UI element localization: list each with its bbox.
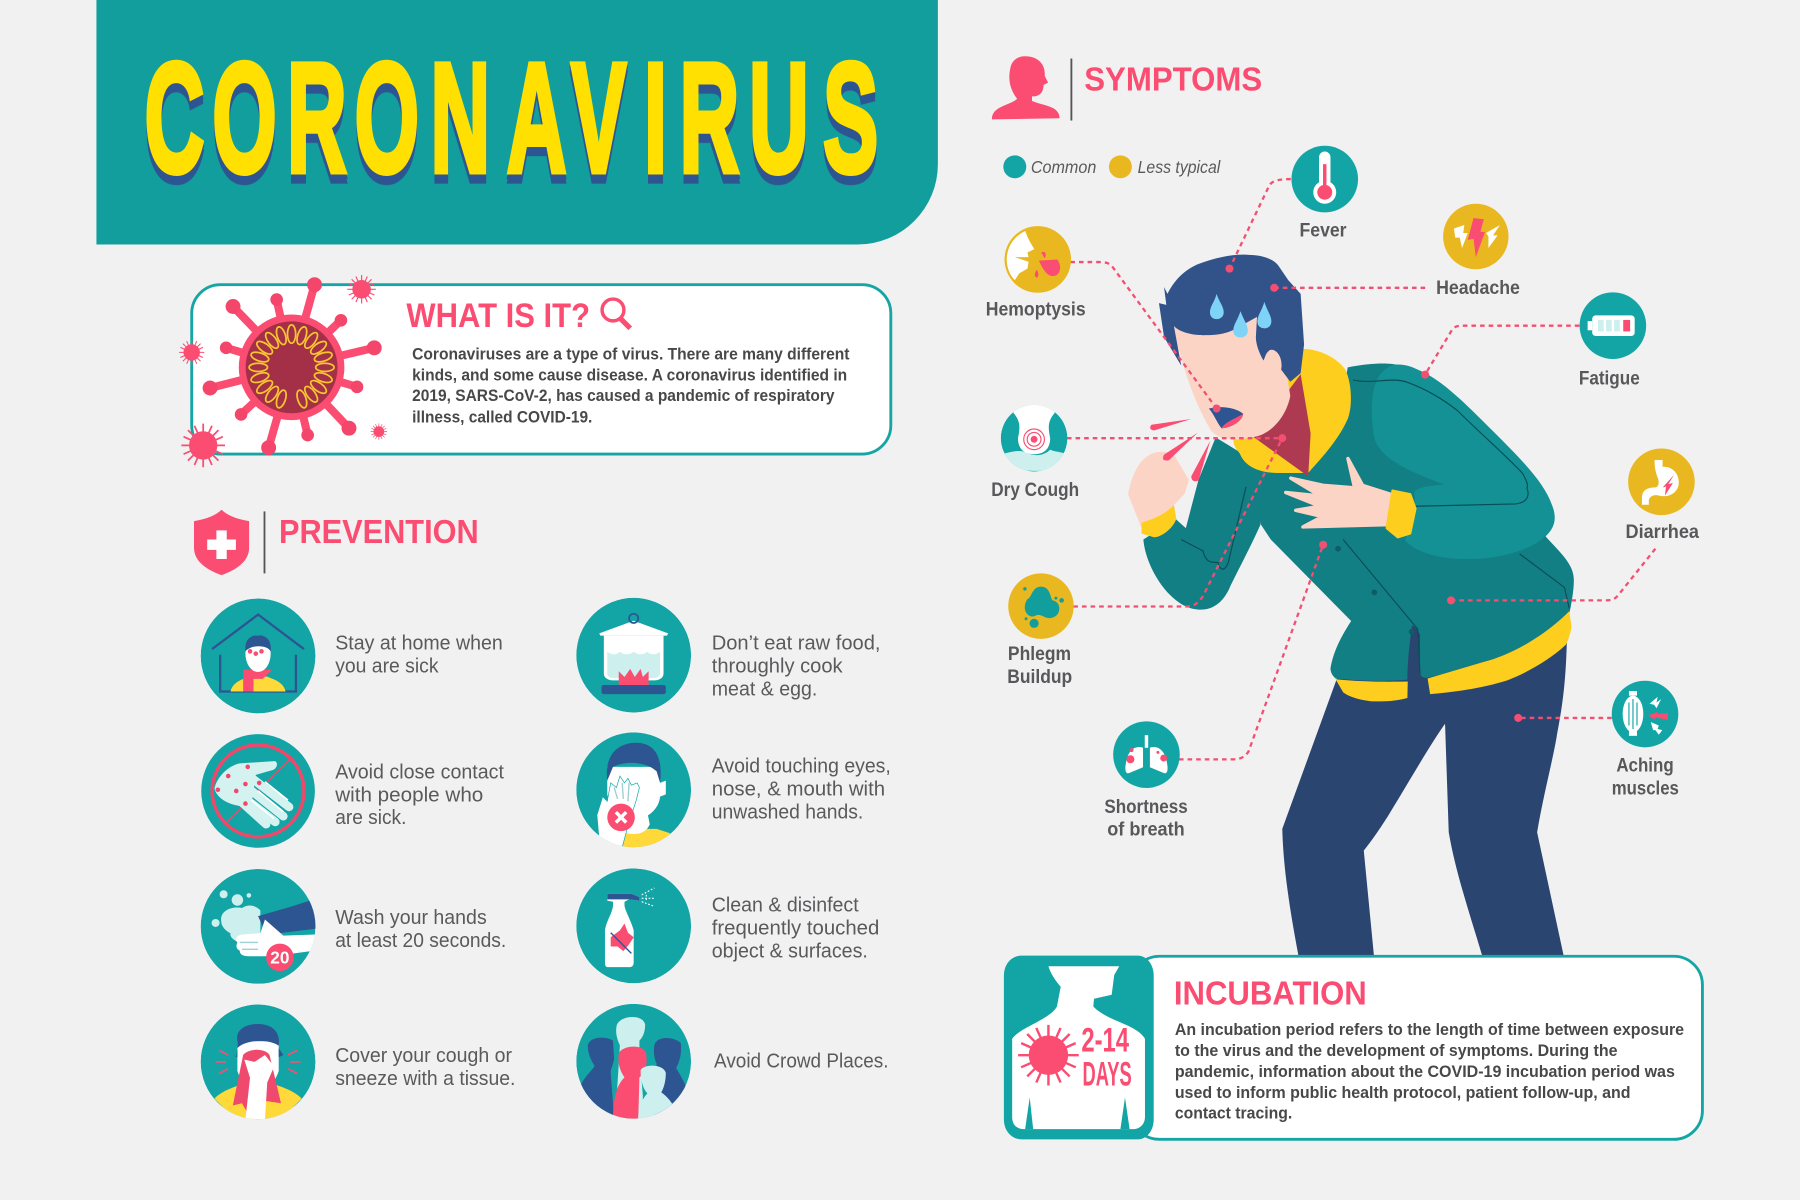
symptom: phlegm buildup: Buildup (1007, 666, 1072, 688)
panel: incubation (1004, 956, 1702, 1139)
text: clean and disinfect (712, 893, 879, 962)
text: stay at home (335, 632, 503, 678)
jacket right sleeve (1372, 365, 1555, 559)
icon: disinfectant spray (576, 868, 691, 983)
jacket hem (1336, 611, 1572, 701)
icon: avoid close contact (201, 734, 315, 848)
fist (1128, 452, 1189, 528)
icon: shield (194, 510, 249, 575)
panel: symptoms header (992, 56, 1262, 121)
legend (1003, 155, 1221, 178)
icon: wash hands: 20 (270, 948, 289, 968)
icon: stay at home (201, 599, 315, 713)
incubation days graphic (1004, 956, 1154, 1139)
text: what is it description: 2019, SARS-CoV-2, has caused a pandemic of respiratory (412, 386, 835, 405)
text: avoid touching face: Avoid touching eyes, (712, 755, 891, 778)
symptom: aching muscles: Aching (1616, 754, 1674, 776)
icon: crowd (576, 1004, 691, 1119)
mouth (1209, 407, 1243, 428)
text: cook food (712, 632, 880, 701)
symptom: dry cough (991, 405, 1079, 501)
text: incubation description: pandemic, information about the COVID-19 incubation period was (1175, 1062, 1675, 1081)
text: what is it description: illness, called COVID-19. (412, 407, 592, 426)
icon: magnifier (602, 299, 630, 328)
text: avoid close contact: are sick. (335, 806, 406, 829)
icon: large coronavirus (203, 277, 382, 455)
icon: wash hands (201, 869, 315, 984)
text: cover cough (335, 1044, 515, 1090)
text: avoid crowd places: Avoid Crowd Places. (714, 1050, 889, 1073)
title: CORONAVIRUS (145, 32, 878, 205)
jacket body (1240, 364, 1574, 681)
icon: small viruses (179, 275, 387, 467)
symptom: fatigue (1579, 292, 1646, 390)
symptom: shortness of breath: of breath (1107, 819, 1185, 841)
face (1173, 316, 1290, 440)
heading: prevention: PREVENTION (279, 514, 479, 551)
text: avoid close contact (334, 760, 504, 829)
symptom: hemoptysis: Hemoptysis (986, 299, 1086, 321)
symptom: aching muscles (1612, 681, 1679, 799)
icon: person silhouette (992, 56, 1060, 119)
text: wash hands: at least 20 seconds. (335, 929, 506, 952)
trousers (1282, 620, 1567, 955)
symptom: aching muscles: muscles (1612, 777, 1679, 799)
panel: what is it (179, 275, 891, 467)
text: what is it description: Coronaviruses are a type of virus. There are many different (412, 344, 850, 363)
text: clean and disinfect: Clean & disinfect (712, 893, 859, 916)
text: clean and disinfect: frequently touched (712, 916, 879, 939)
text: what is it description (412, 344, 850, 426)
text: what is it description: kinds, and some cause disease. A coronavirus identified in (412, 366, 847, 385)
text: avoid touching face: nose, & mouth with (712, 778, 885, 801)
incubation days graphic: 2-14 (1081, 1021, 1129, 1060)
sweat drops (1210, 294, 1271, 338)
legend: Less typical (1138, 157, 1221, 177)
symptom: fever: Fever (1299, 219, 1347, 241)
icon: cooking pot (576, 598, 691, 713)
heading: symptoms: SYMPTOMS (1084, 62, 1262, 99)
hair (1159, 255, 1304, 382)
symptom: shortness of breath (1104, 721, 1188, 841)
text: incubation description (1175, 1020, 1684, 1123)
text: clean and disinfect: object & surfaces. (712, 939, 868, 962)
incubation days graphic: DAYS (1083, 1056, 1132, 1094)
heading: incubation: INCUBATION (1174, 975, 1367, 1012)
symptom: headache: Headache (1436, 277, 1520, 299)
text: avoid close contact: with people who (334, 783, 483, 806)
symptom: diarrhea (1626, 449, 1699, 543)
heading: what is it: WHAT IS IT? (406, 297, 590, 335)
text: stay at home: you are sick (335, 655, 439, 678)
text: incubation description: contact tracing. (1175, 1104, 1292, 1123)
text: avoid touching face (712, 755, 891, 823)
text: cook food: Don’t eat raw food, (712, 632, 880, 655)
text: incubation description: An incubation period refers to the length of time between exposure (1175, 1020, 1684, 1039)
text: cover cough: sneeze with a tissue. (335, 1067, 515, 1090)
chest hand (1286, 458, 1390, 527)
text: stay at home: Stay at home when (335, 632, 503, 655)
text: incubation description: used to inform public health protocol, patient follow-up, and (1175, 1083, 1631, 1102)
icon: virus on chest (1018, 1025, 1079, 1086)
title banner (96, 0, 938, 245)
symptom: dry cough: Dry Cough (991, 479, 1079, 501)
illustration: coughing man (1128, 255, 1574, 955)
jacket left sleeve (1143, 437, 1260, 610)
symptom: fever (1291, 146, 1358, 241)
text: incubation description: to the virus and the development of symptoms. During the (1175, 1041, 1617, 1060)
text: cover cough: Cover your cough or (335, 1044, 512, 1067)
icon: avoid touching face (576, 732, 691, 847)
text: avoid touching face: unwashed hands. (712, 800, 863, 823)
text: avoid close contact: Avoid close contact (335, 760, 504, 783)
symptom: hemoptysis (986, 226, 1086, 321)
collar (1233, 349, 1351, 473)
symptom: diarrhea: Diarrhea (1626, 521, 1699, 543)
icon: cover cough (201, 1004, 315, 1119)
symptom: shortness of breath: Shortness (1104, 796, 1188, 818)
text: cook food: throughly cook (712, 655, 843, 678)
text: wash hands (335, 906, 506, 952)
text: wash hands: Wash your hands (335, 906, 487, 929)
symptom: headache (1436, 204, 1520, 299)
scarf (1254, 374, 1311, 476)
symptom: phlegm buildup (1007, 573, 1074, 688)
symptom: fatigue: Fatigue (1579, 368, 1640, 390)
connector lines (1067, 179, 1655, 759)
panel: prevention (194, 510, 891, 1119)
symptom: phlegm buildup: Phlegm (1008, 643, 1071, 665)
text: cook food: meat & egg. (712, 678, 817, 701)
legend: Common (1031, 157, 1096, 177)
cough droplets (1150, 419, 1210, 481)
